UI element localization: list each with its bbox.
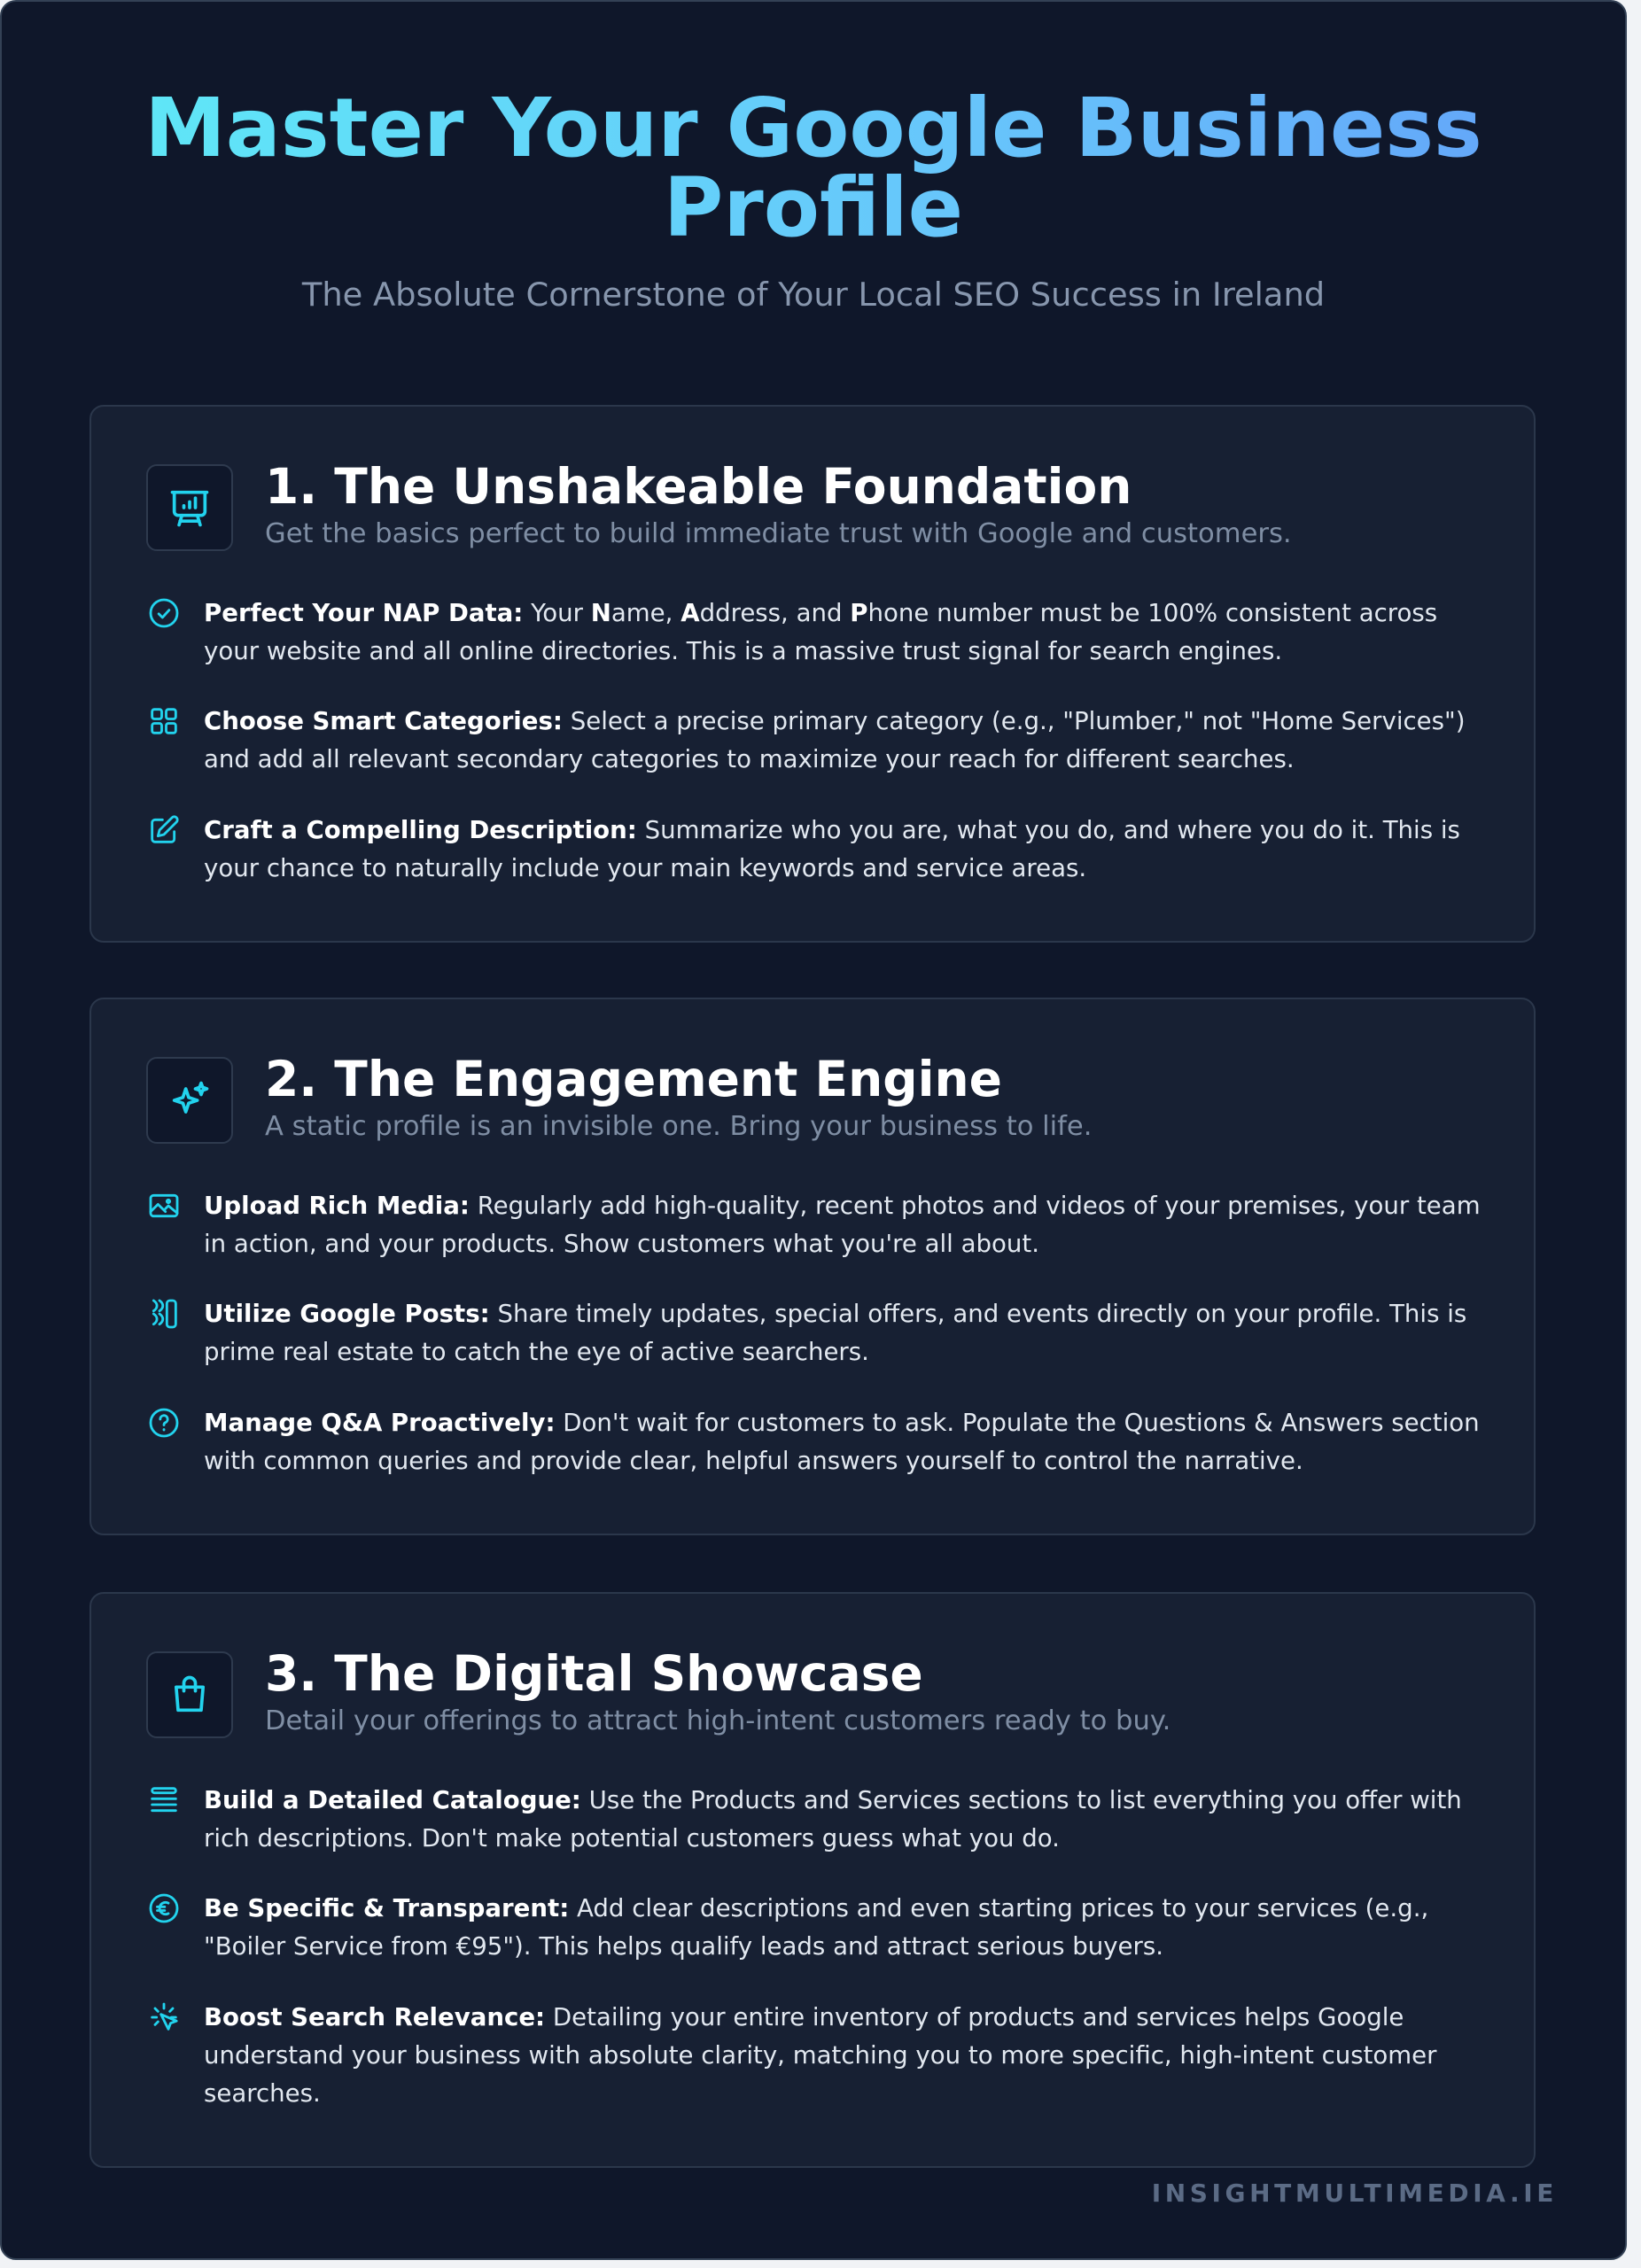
item: posts: prime real estate to catch the eye of active searchers. — [204, 1337, 869, 1366]
item: description: your chance to naturally include your main keywords and service areas. — [204, 853, 1086, 882]
item: Q&A — [149, 1408, 1480, 1475]
item: relevance — [151, 2002, 1437, 2108]
panel: engagement — [89, 998, 1536, 1535]
icon: grid — [151, 708, 177, 734]
item: pricing — [149, 1893, 1428, 1961]
subheading: Detail your offerings to attract high-intent customers ready to buy. — [265, 1705, 1170, 1736]
item: media: in action, and your products. Show customers what you're all about. — [204, 1229, 1039, 1258]
item: catalogue — [151, 1785, 1462, 1852]
icon: image — [149, 1194, 179, 1217]
item: NAP — [149, 598, 1437, 665]
item: categories: and add all relevant secondary categories to maximize your reach for different searches. — [204, 744, 1295, 773]
item: NAP: your website and all online directories. This is a massive trust signal for search engines. — [204, 636, 1282, 665]
icon: euro — [149, 1894, 179, 1922]
item: media — [149, 1191, 1481, 1258]
icon: check circle — [149, 599, 179, 627]
item: posts — [152, 1299, 1466, 1366]
subtitle: The Absolute Cornerstone of Your Local SEO Success in Ireland — [302, 276, 1325, 314]
panel: foundation — [89, 405, 1536, 943]
title — [144, 81, 1482, 255]
item: posts: Utilize Google Posts: Share timely updates, special offers, and events directly on your profile. This is — [204, 1299, 1466, 1328]
item: relevance: searches. — [204, 2078, 321, 2108]
icon: shopping bag — [146, 1651, 233, 1738]
icon: presentation chart — [146, 464, 233, 551]
icon: sparkles — [146, 1057, 233, 1144]
item: description: Craft a Compelling Description: Summarize who you are, what you do, and where you do it. This is — [204, 815, 1460, 844]
item: categories — [151, 706, 1465, 773]
heading: 2. The Engagement Engine — [265, 1051, 1002, 1107]
icon: posts — [152, 1299, 177, 1329]
item: relevance: Boost Search Relevance: Detailing your entire inventory of products and services helps Google — [204, 2002, 1404, 2031]
item: Q&A: with common queries and provide clear, helpful answers yourself to control the narrative. — [204, 1446, 1303, 1475]
subheading: Get the basics perfect to build immediate trust with Google and customers. — [265, 518, 1292, 549]
item: NAP: Perfect Your NAP Data: Your Name, Address, and Phone number must be 100% consistent across — [204, 598, 1437, 627]
item: relevance: understand your business with absolute clarity, matching you to more specific, high-intent customer — [204, 2040, 1437, 2070]
icon: click — [151, 2002, 178, 2031]
item: description — [151, 815, 1460, 882]
icon: edit — [151, 815, 179, 843]
item: pricing: "Boiler Service from €95"). This helps qualify leads and attract serious buyers. — [204, 1931, 1163, 1961]
title: Master Your Google Business — [144, 81, 1482, 175]
footer brand: INSIGHTMULTIMEDIA.IE — [1152, 2179, 1558, 2208]
icon: list — [151, 1787, 177, 1813]
item: catalogue: Build a Detailed Catalogue: Use the Products and Services sections to list everything you offer with — [204, 1785, 1462, 1814]
item: pricing: Be Specific & Transparent: Add clear descriptions and even starting prices to your services (e.g., — [204, 1893, 1428, 1922]
heading: 1. The Unshakeable Foundation — [265, 458, 1132, 515]
item: Q&A: Manage Q&A Proactively: Don't wait for customers to ask. Populate the Questions & Answers section — [204, 1408, 1480, 1437]
subheading: A static profile is an invisible one. Bring your business to life. — [265, 1111, 1092, 1142]
heading: 3. The Digital Showcase — [265, 1645, 923, 1702]
item: categories: Choose Smart Categories: Select a precise primary category (e.g., "Plumber," not "Home Services") — [204, 706, 1465, 735]
item: media: Upload Rich Media: Regularly add high-quality, recent photos and videos of your premises, your team — [204, 1191, 1481, 1220]
panel: showcase — [89, 1592, 1536, 2168]
icon: question — [149, 1409, 179, 1437]
title: Profile — [664, 160, 963, 255]
item: catalogue: rich descriptions. Don't make potential customers guess what you do. — [204, 1823, 1060, 1852]
